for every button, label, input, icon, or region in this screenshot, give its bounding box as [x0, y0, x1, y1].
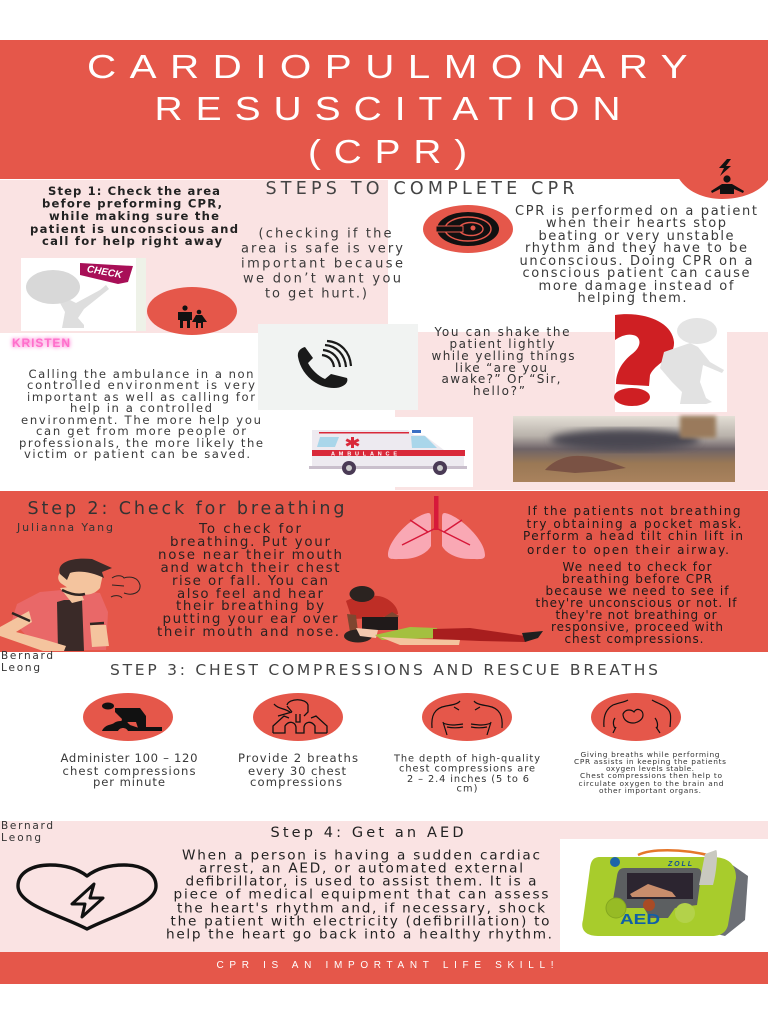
text: when CPR is performed: conscious patient can cause — [522, 266, 750, 281]
image: question mark figure — [614, 313, 727, 412]
text: AED explanation: the patient with electricity (defibrillation) to — [170, 914, 550, 930]
caption: Administer 100 – 120 — [60, 751, 198, 765]
text: how to check breathing: their breathing by — [176, 599, 324, 614]
text: AED explanation — [166, 848, 552, 942]
step 1 heading: patient is unconscious and — [30, 222, 238, 236]
text: how to check breathing: putting your ear over — [162, 612, 338, 627]
icon: chest outline — [432, 701, 502, 735]
panel: step 4 — [0, 820, 768, 952]
caption: Provide 2 breaths — [238, 751, 358, 765]
text: shake the patient — [432, 325, 574, 398]
credit: Bernard Leong step 4: Leong — [1, 832, 41, 844]
step 2 heading: Step 2: Check for breathing — [28, 499, 344, 519]
text: calling the ambulance: can get from more people or — [36, 424, 246, 438]
text: why check before CPR: because we need to see if — [546, 584, 729, 598]
credit: Bernard Leong step 4 — [1, 820, 53, 844]
caption — [60, 751, 198, 789]
title — [87, 48, 701, 170]
text: shake the patient: awake?” Or “Sir, — [442, 372, 560, 386]
caption: compressions — [250, 775, 342, 789]
text: pocket mask: order to open their airway. — [527, 543, 729, 557]
text: shake the patient: patient lightly — [450, 337, 554, 351]
image: figure pointing at check button — [21, 258, 146, 331]
title: CARDIOPULMONARY — [87, 48, 701, 85]
text: calling the ambulance: help in a controlled — [70, 401, 212, 415]
text: when CPR is performed: CPR is performed on a patient — [515, 204, 757, 219]
icon circle: target — [423, 205, 513, 253]
caption: circulate oxygen to the brain and — [578, 779, 724, 788]
image: AED device: AED — [620, 911, 660, 928]
text: AED explanation: arrest, an AED, or automated external — [199, 860, 523, 876]
text: AED explanation: piece of medical equipment that can assess — [174, 886, 548, 902]
text: shake the patient: You can shake the — [434, 325, 570, 339]
text: area safety: (checking if the — [258, 226, 392, 242]
text: area safety: to get hurt.) — [265, 286, 367, 302]
icon: airway and lungs — [273, 700, 327, 733]
text: why check before CPR: they're unconscious or not. If — [536, 596, 737, 610]
title: (CPR) — [308, 133, 480, 170]
text: why check before CPR: chest compressions. — [564, 632, 704, 646]
icon: chest with heart — [604, 700, 671, 733]
text: shake the patient: like “are you — [455, 361, 547, 375]
image: ambulance — [300, 417, 473, 487]
text: calling the ambulance: important as well as calling for — [27, 390, 255, 404]
credit: Bernard Leong step 4: Bernard — [1, 820, 53, 832]
text: calling the ambulance: controlled environment is very — [27, 378, 255, 392]
step 1 heading: before preforming CPR, — [42, 196, 222, 210]
caption — [393, 754, 540, 794]
icon circle: people — [147, 287, 237, 335]
text: why check before CPR: breathing before CPR — [562, 572, 712, 586]
text: AED explanation: When a person is having a sudden cardiac — [182, 848, 540, 864]
caption: Chest compressions then help to — [580, 771, 722, 780]
caption: The depth of high-quality — [393, 754, 540, 764]
illustration: coughing man — [0, 559, 140, 651]
text: how to check breathing: their mouth and nose. — [157, 625, 339, 640]
text: how to check breathing: also feel and hear — [177, 587, 323, 602]
step 1 heading: while making sure the — [49, 209, 219, 223]
text: how to check breathing: and watch their chest — [160, 561, 340, 576]
step 1 heading — [30, 184, 238, 248]
text: AED explanation: help the heart go back into a healthy rhythm. — [166, 926, 552, 942]
image: figure pointing at check button: CHECK — [86, 264, 124, 281]
text: why check before CPR — [536, 560, 737, 646]
image: AED device: ZOLL — [667, 861, 692, 868]
text: when CPR is performed: when their hearts stop — [546, 216, 726, 231]
panel: phone — [258, 324, 418, 410]
step 3 item: chest depth — [393, 693, 540, 794]
caption: oxygen levels stable. — [606, 764, 694, 773]
caption: chest compressions are — [399, 764, 535, 774]
text: when CPR is performed: rhythm and they have to be — [525, 241, 747, 256]
caption: every 30 chest — [248, 764, 346, 778]
illustration: rescuer and patient — [344, 586, 543, 645]
icon: heart with bolt — [18, 865, 156, 929]
step 1 heading: call for help right away — [42, 234, 222, 248]
text: calling the ambulance: professionals, the more likely the — [19, 436, 263, 450]
illustration: lungs — [388, 496, 485, 559]
text: pocket mask: Perform a head tilt chin lift in — [523, 529, 743, 543]
image: patient on the floor — [513, 416, 735, 482]
header banner — [0, 40, 768, 199]
text: when CPR is performed: helping them. — [578, 291, 686, 306]
caption: CPR assists in keeping the patients — [574, 757, 726, 766]
footer banner: CPR IS AN IMPORTANT LIFE SKILL! — [216, 960, 554, 971]
caption: chest compressions — [62, 764, 196, 778]
panel: step 1 — [0, 180, 388, 335]
text: area safety: important because — [241, 256, 403, 272]
heading: steps to complete CPR: STEPS TO COMPLETE CPR — [266, 179, 574, 199]
caption: per minute — [93, 775, 165, 789]
icon: kneeling rescuer — [102, 702, 162, 731]
text: when CPR is performed: unconscious. Doing CPR on a — [520, 254, 752, 269]
text: why check before CPR: responsive, proceed with — [551, 620, 723, 634]
text: shake the patient: while yelling things — [432, 349, 574, 363]
text: area safety — [241, 226, 403, 302]
step 1 heading: Step 1: Check the area — [48, 184, 220, 198]
step 3 item: compressions — [60, 693, 198, 789]
step 3 item: oxygen circulation — [574, 693, 726, 795]
caption: 2 – 2.4 inches (5 to 6 — [407, 774, 529, 785]
text: area safety: area is safe is very — [241, 242, 403, 256]
credit: Julianna Yang: Julianna Yang — [16, 521, 113, 534]
step 3 item: breaths — [238, 693, 358, 789]
text: how to check breathing: rise or fall. You can — [172, 574, 328, 589]
text: shake the patient: hello?” — [473, 384, 525, 398]
image: AED device — [560, 839, 768, 952]
icon: person with lightning bolt — [711, 159, 744, 194]
text: how to check breathing — [157, 522, 342, 640]
caption: Giving breaths while performing — [580, 750, 720, 759]
text: when CPR is performed — [515, 204, 757, 306]
text: pocket mask: If the patients not breathing — [528, 504, 740, 518]
text: when CPR is performed: beating or very unstable — [538, 229, 734, 244]
text: how to check breathing: breathing. Put your — [170, 535, 330, 550]
text: area safety: we don’t want you — [243, 272, 401, 286]
icon: phone with signal — [298, 341, 351, 388]
image: ambulance: AMBULANCE — [331, 452, 397, 458]
caption: cm) — [456, 784, 478, 794]
title: RESUSCITATION — [154, 90, 634, 127]
text: calling the ambulance: environment. The more help you — [21, 413, 261, 427]
text: how to check breathing: nose near their mouth — [158, 548, 342, 563]
text: calling the ambulance: Calling the ambulance in a non — [28, 367, 254, 381]
text: why check before CPR: they're not breathing or — [556, 608, 717, 622]
text: AED explanation: the heart's rhythm and, if necessary, shock — [177, 900, 545, 916]
step 3 heading: STEP 3: CHEST COMPRESSIONS AND RESCUE BREATHS — [110, 661, 658, 679]
step 4 heading: Step 4: Get an AED — [270, 825, 464, 841]
text: calling the ambulance: victim or patient can be saved. — [24, 447, 250, 461]
text: when CPR is performed: more damage instead of — [538, 279, 734, 294]
text: pocket mask: try obtaining a pocket mask. — [526, 517, 742, 531]
panel: step 2 — [0, 491, 768, 652]
text: calling the ambulance — [19, 367, 263, 461]
credit: Bernard Leong step 3 — [1, 650, 53, 674]
label: Kristen: KRISTEN — [12, 336, 70, 350]
footer banner — [0, 952, 768, 984]
panel: shake the patient — [395, 313, 768, 490]
caption — [238, 751, 358, 789]
text: pocket mask — [523, 504, 743, 557]
credit: Bernard Leong step 3: Leong — [1, 662, 40, 674]
text: why check before CPR: We need to check for — [562, 560, 712, 574]
caption — [574, 750, 726, 795]
caption: other important organs. — [599, 786, 701, 795]
text: how to check breathing: To check for — [198, 522, 301, 537]
text: AED explanation: defibrillator, is used to assist them. It is a — [186, 874, 536, 890]
credit: Bernard Leong step 3: Bernard — [1, 650, 53, 662]
